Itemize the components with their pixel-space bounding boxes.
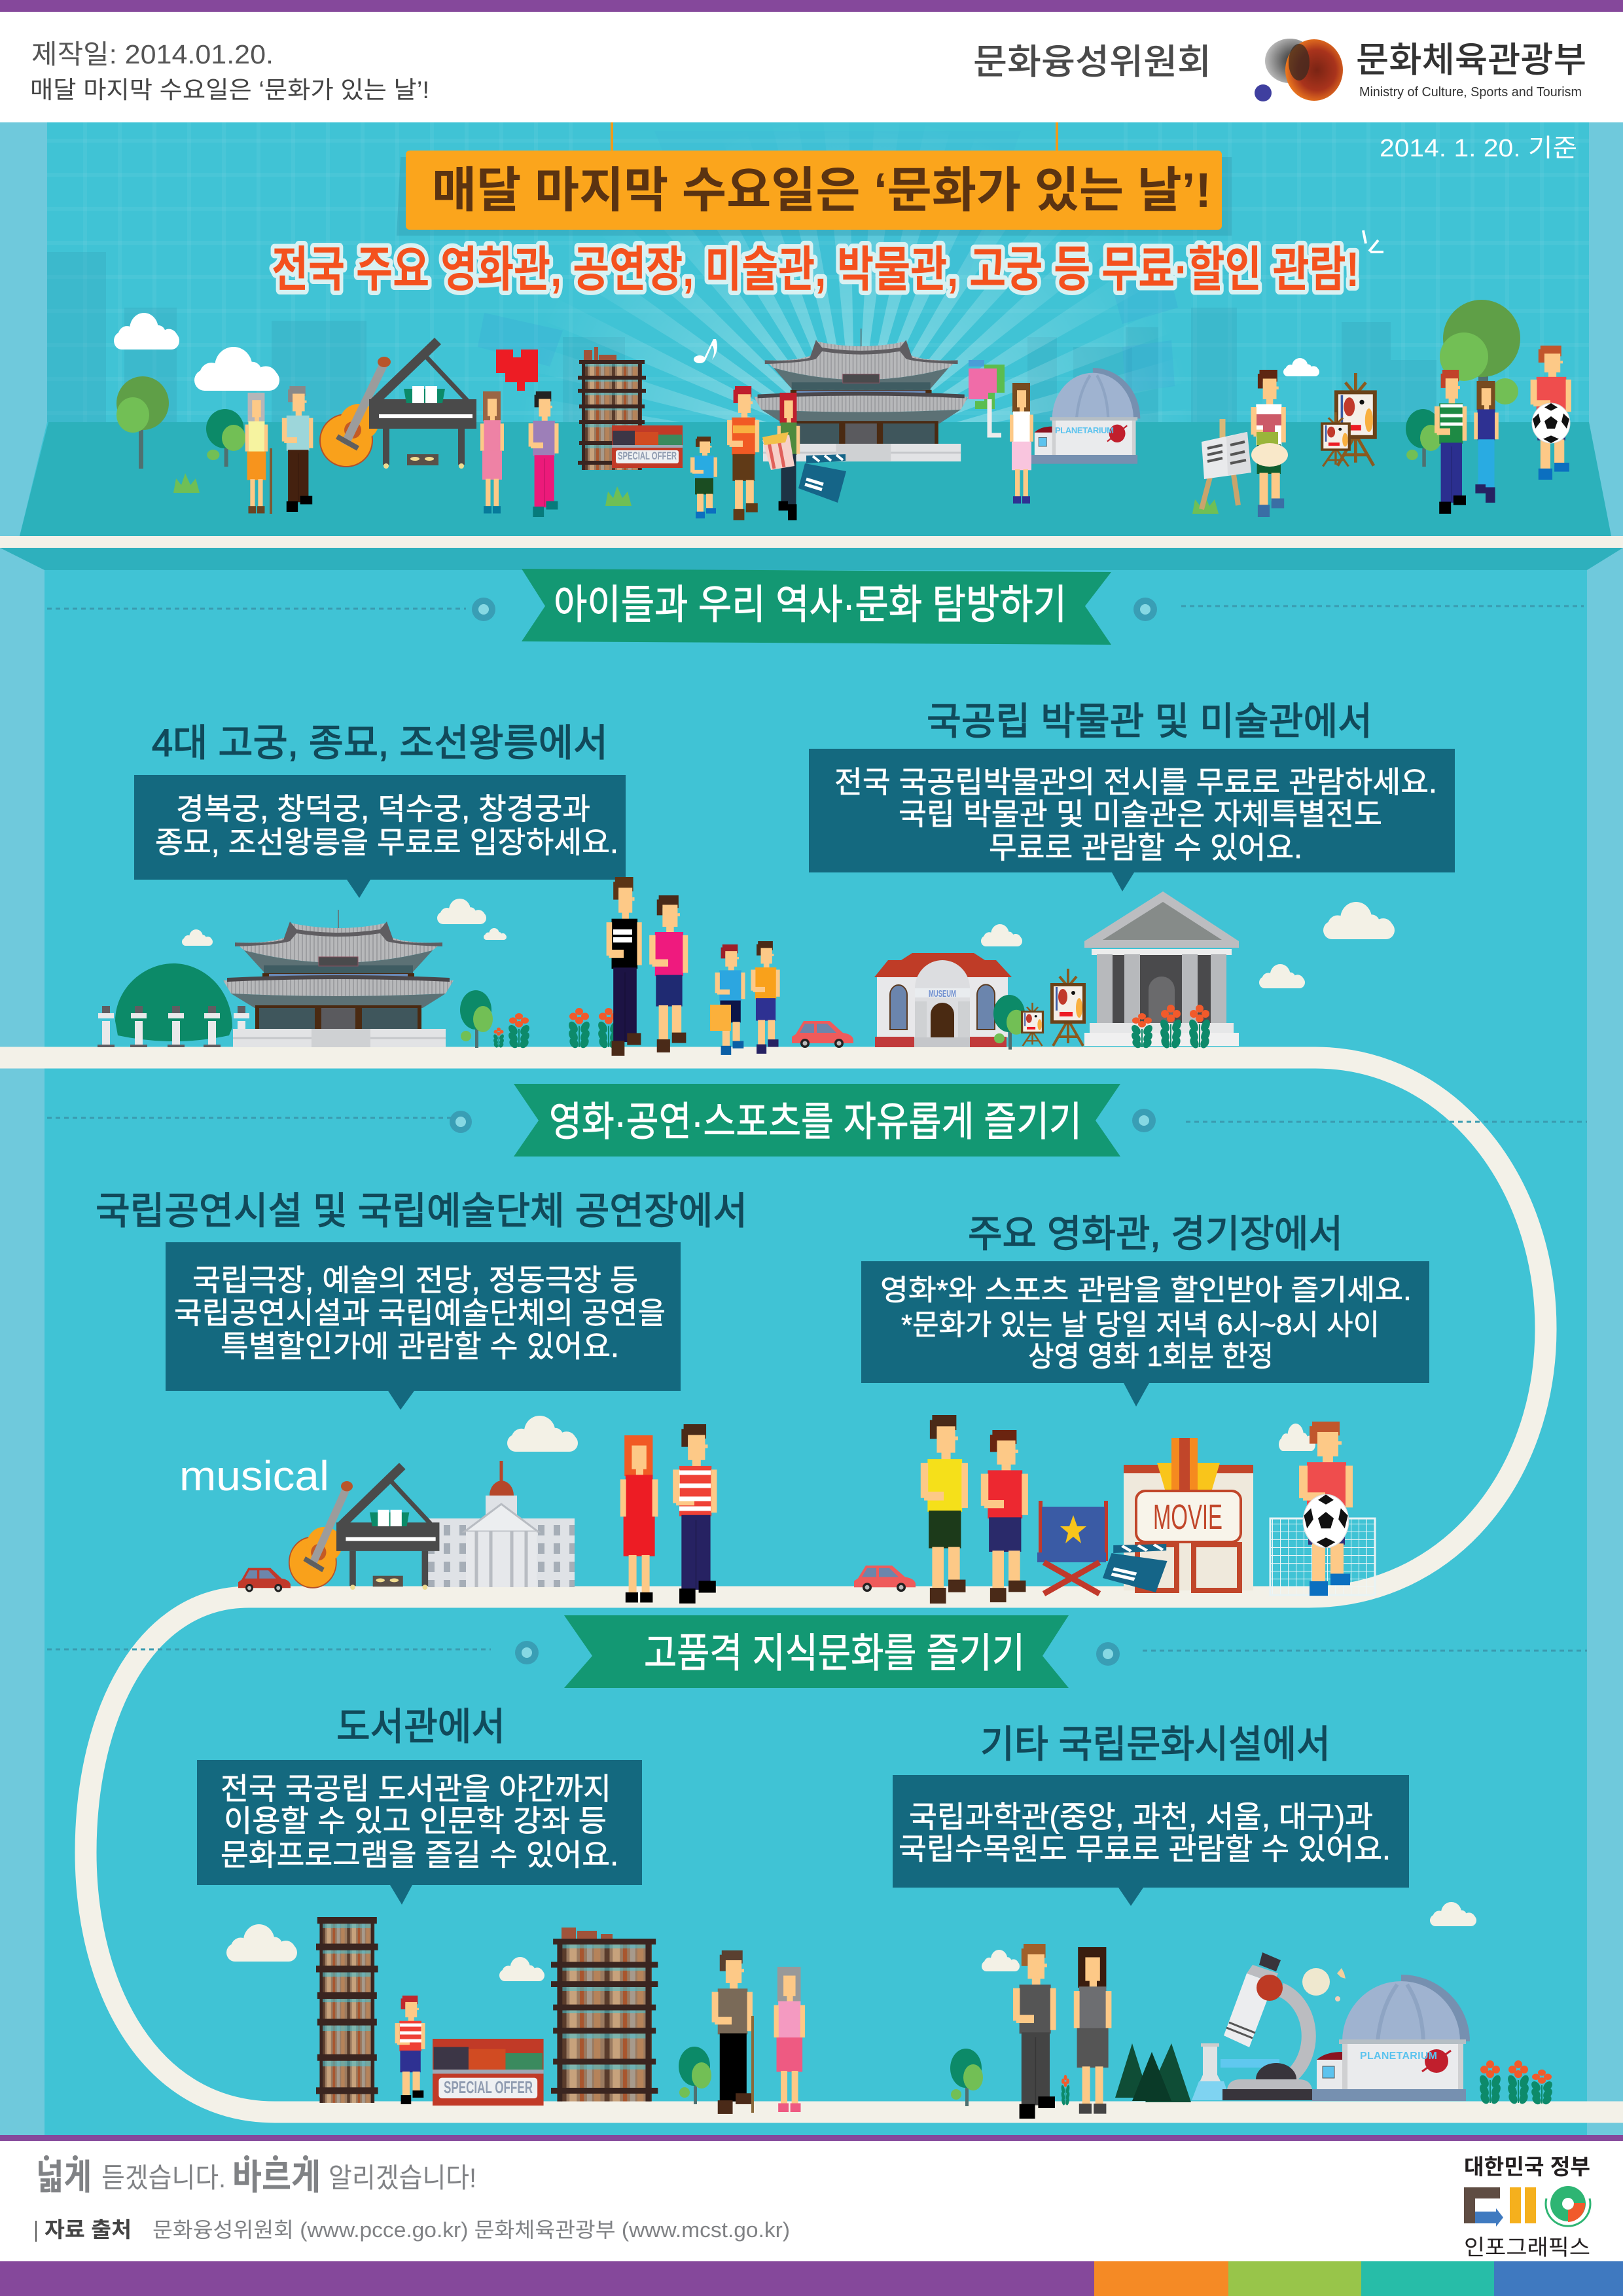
header subtitle: 매달 마지막 수요일은 ‘문화가 있는 날’!: [30, 77, 429, 103]
person: boy: [395, 1996, 425, 2104]
ministry english name: Ministry of Culture, Sports and Tourism: [1359, 85, 1582, 99]
special offer stall: SPECIAL OFFER: [444, 2077, 533, 2097]
header panel: [30, 39, 1586, 103]
musical label: musical: [179, 1452, 329, 1499]
callout: performance: 특별할인가에 관람할 수 있어요.: [221, 1329, 619, 1363]
footer slogan: 넓게: [36, 2158, 92, 2197]
connector dots: [47, 1641, 1587, 1666]
callout: other facilities: 국립과학관(중앙, 과천, 서울, 대구)과: [909, 1800, 1373, 1834]
section title: 고품격 지식문화를 즐기기: [644, 1631, 1025, 1676]
connector dots: [47, 1109, 1587, 1133]
person: soccer player: [1299, 1422, 1353, 1596]
heading: museums: 국공립 박물관 및 미술관에서: [927, 700, 1372, 743]
subtitle: 전국 주요 영화관, 공연장, 미술관, 박물관, 고궁 등 무료·할인 관람!: [272, 242, 1359, 296]
special offer stall: [433, 2039, 544, 2106]
section ribbon: [564, 1615, 1069, 1688]
winding cream road: [0, 1058, 1623, 2112]
footer slogan: 알리겠습니다!: [329, 2162, 476, 2193]
section title: 영화·공연·스포츠를 자유롭게 즐기기: [549, 1100, 1082, 1145]
movie theatre: [1124, 1438, 1253, 1590]
palace: [754, 329, 968, 461]
section title: 아이들과 우리 역사·문화 탐방하기: [554, 583, 1067, 628]
popcorn and clapper props: [762, 432, 794, 470]
icon: clouds: [226, 1902, 1476, 1981]
orange title banner: [406, 151, 1222, 230]
heading: other facilities: 기타 국립문화시설에서: [980, 1723, 1330, 1766]
movie theatre: MOVIE: [1153, 1498, 1222, 1537]
infographics label: 인포그래픽스: [1464, 2235, 1590, 2259]
icon: guitar: [320, 357, 391, 467]
banner title: 매달 마지막 수요일은 ‘문화가 있는 날’!: [432, 163, 1211, 217]
icon: music note: [694, 339, 717, 363]
planetarium: [1312, 1975, 1470, 2101]
callout: libraries: 문화프로그램을 즐길 수 있어요.: [221, 1838, 618, 1872]
callout: museums: 무료로 관람할 수 있어요.: [989, 831, 1302, 865]
icon: flowers: [1130, 1005, 1212, 1050]
icon: pink car: [854, 1566, 916, 1592]
icon: wide bookshelf: [551, 1928, 658, 2102]
government label: 대한민국 정부: [1464, 2155, 1590, 2179]
icon: guitar: [289, 1481, 353, 1588]
icon: grass: [173, 473, 1219, 514]
sparkle strokes: [1363, 230, 1383, 252]
callout: cinemas: *문화가 있는 날 당일 저녁 6시~8시 사이: [901, 1309, 1380, 1341]
people: family: [607, 877, 780, 1056]
source label: 자료 출처: [45, 2217, 132, 2242]
director chair: [1037, 1501, 1106, 1594]
footer slogan: 바르게: [232, 2158, 321, 2197]
icon: flowers: [1061, 2060, 1554, 2106]
national theatre building: [427, 1461, 575, 1587]
panel: section 1 history and culture: [47, 569, 1584, 1056]
floor underside: [0, 548, 1623, 570]
palace: [223, 910, 454, 1047]
callout: other facilities: [893, 1775, 1409, 1906]
callout: other facilities: 국립수목원도 무료로 관람할 수 있어요.: [899, 1832, 1391, 1866]
icon: balloon: [969, 360, 1005, 435]
flask: [1192, 2043, 1230, 2100]
icon: tall bookshelf: [316, 1917, 378, 2103]
callout: museums: 전국 국공립박물관의 전시를 무료로 관람하세요.: [834, 765, 1437, 799]
national museum temple: [1084, 891, 1239, 1046]
section ribbon: [522, 569, 1111, 645]
icon: clouds: [114, 313, 1319, 391]
people: suited couple: [1013, 1944, 1111, 2119]
callout: cinemas: 영화*와 스포츠 관람을 할인받아 즐기세요.: [880, 1274, 1412, 1306]
heading: cinemas: 주요 영화관, 경기장에서: [968, 1213, 1343, 1255]
icon: trees: [679, 2047, 983, 2106]
banner strings: [612, 122, 1057, 152]
callout: performance: 국립공연시설과 국립예술단체의 공연을: [174, 1296, 666, 1330]
icon: car: [792, 1021, 853, 1048]
callout: performance: [166, 1242, 681, 1410]
icon: piano: [336, 1463, 439, 1590]
icon: flowers: [493, 1008, 621, 1049]
icon: moon and stars: [1302, 1968, 1346, 2001]
callout: performance: 국립극장, 예술의 전당, 정동극장 등: [192, 1263, 638, 1297]
microscope: [1221, 1952, 1318, 2100]
callout: palaces: [134, 775, 626, 898]
footer slogan: 듣겠습니다.: [101, 2162, 226, 2193]
icon: open book on easel: [1202, 419, 1251, 509]
top purple bar: [0, 0, 1623, 12]
icon: infographics logo: [1464, 2186, 1590, 2227]
panel: hero scene: [0, 122, 1623, 570]
connector dots: [47, 598, 1584, 621]
hill: [115, 963, 232, 1041]
callout: museums: [809, 749, 1455, 891]
footer purple line: [0, 2135, 1623, 2141]
callout: cinemas: 상영 영화 1회분 한정: [1028, 1340, 1274, 1372]
callout: libraries: [197, 1760, 642, 1905]
heading: performance halls: 국립공연시설 및 국립예술단체 공연장에서: [96, 1190, 747, 1232]
callout: cinemas: [861, 1261, 1429, 1407]
ministry name: 문화체육관광부: [1356, 41, 1586, 80]
production date: 제작일: 2014.01.20.: [31, 39, 274, 69]
people: hero: [245, 346, 1571, 520]
base date: 2014. 1. 20. 기준: [1380, 135, 1577, 162]
icon: heart: [496, 350, 538, 391]
icon: ministry logo: [1255, 39, 1343, 101]
cream strip: [0, 536, 1623, 548]
callout: palaces: 경복궁, 창덕궁, 덕수궁, 창경궁과: [176, 792, 590, 826]
icon: clapperboard: [798, 454, 846, 503]
special offer stall: [612, 425, 683, 468]
icon: easel paintings: [1321, 373, 1377, 467]
footer slogan: [36, 2155, 476, 2197]
icon: tree: [993, 995, 1026, 1050]
callout: libraries: 이용할 수 있고 인문학 강좌 등: [224, 1804, 607, 1838]
hero sky grid and skyline: [47, 122, 1589, 422]
planetarium: PLANETARIUM: [1055, 425, 1114, 435]
banner shadow: [397, 157, 1232, 236]
icon: bookshelf: [578, 347, 646, 470]
icon: piano: [369, 338, 476, 469]
people: senior couple: [712, 1950, 805, 2114]
people: couple: [620, 1424, 717, 1604]
icon: easel paintings: [1021, 969, 1086, 1046]
icon: small red car: [238, 1568, 291, 1592]
museum building: MUSEUM: [929, 988, 956, 999]
museum building: [874, 953, 1012, 1047]
panel: section 2 film performance sports: [47, 1084, 1587, 1604]
icon: trees: [116, 300, 1520, 469]
icon: clouds: [507, 1416, 1315, 1452]
icon: pine trees: [1115, 2043, 1191, 2102]
heading: libraries: 도서관에서: [336, 1706, 505, 1748]
callout: palaces: 종묘, 조선왕릉을 무료로 입장하세요.: [155, 825, 618, 859]
callout: museums: 국립 박물관 및 미술관은 자체특별전도: [899, 797, 1382, 831]
icon: clouds: [182, 899, 1395, 988]
footer panel: [0, 2141, 1623, 2261]
source text: 문화융성위원회 (www.pcce.go.kr) 문화체육관광부 (www.mcst.go.kr): [152, 2218, 790, 2242]
icon: clapperboard: [1103, 1544, 1168, 1592]
icon: tree: [460, 990, 493, 1048]
hero floor: [20, 422, 1611, 536]
section ribbon: [514, 1084, 1120, 1157]
committee name: 문화융성위원회: [973, 43, 1211, 82]
heading: palaces: 4대 고궁, 종묘, 조선왕릉에서: [152, 722, 608, 764]
special offer stall: SPECIAL OFFER: [618, 450, 677, 462]
planetarium: PLANETARIUM: [1360, 2051, 1437, 2062]
bottom colour bar: [0, 2261, 1623, 2296]
planetarium: [1031, 368, 1140, 464]
callout: libraries: 전국 국공립 도서관을 야간까지: [221, 1772, 611, 1806]
soccer goal: [1270, 1518, 1375, 1595]
stone lanterns: [98, 1006, 249, 1047]
people: sports fans: [921, 1415, 1028, 1604]
panel: section 3 knowledge culture: [47, 1615, 1587, 2119]
